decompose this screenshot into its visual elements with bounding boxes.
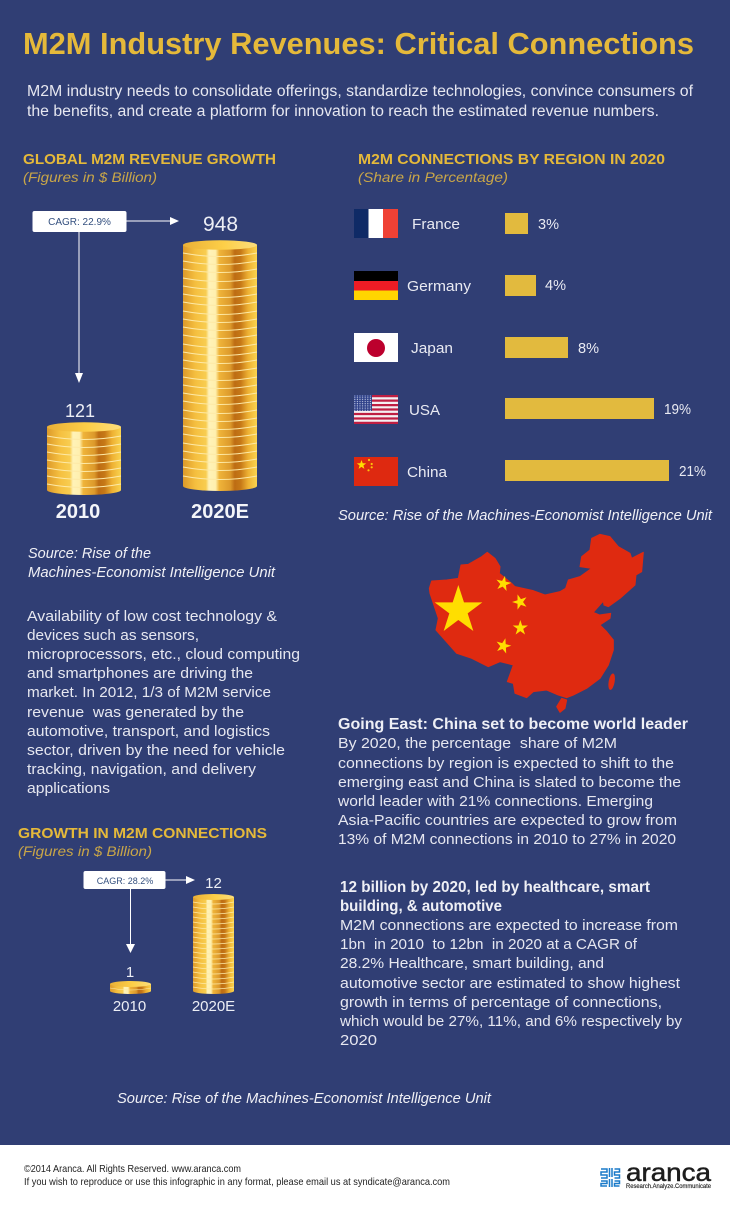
heading: global revenue growth: GLOBAL M2M REVENUE GROWTH xyxy=(23,151,276,168)
row: USA xyxy=(354,395,691,424)
map: China with flag stars xyxy=(429,534,643,712)
row: Japan: 8% xyxy=(578,340,599,357)
paragraph: market drivers: microprocessors, etc., cloud computing xyxy=(27,646,300,663)
text block: 12 billion by 2020: 28.2% Healthcare, smart building, and xyxy=(340,955,604,972)
label: 2010: 2010 xyxy=(56,501,100,523)
row: Japan: Japan xyxy=(411,340,453,357)
text block: Going East: Going East: China set to become world leader xyxy=(338,716,688,733)
row: USA: 19% xyxy=(664,401,691,418)
intro text: M2M industry needs to consolidate offerings, standardize technologies, convince consumers of xyxy=(27,83,694,100)
paragraph: market drivers: revenue was generated by the xyxy=(27,704,244,721)
text block: 12 billion by 2020: which would be 27%, 11%, and 6% respectively by xyxy=(339,1013,683,1030)
text block: Going East: By 2020, the percentage share of M2M xyxy=(338,735,617,752)
heading: connections by region: (Share in Percentage) xyxy=(358,169,508,185)
row: Germany: Germany xyxy=(407,278,472,295)
text block: Going East: Asia-Pacific countries are expected to grow from xyxy=(338,812,677,829)
source: revenue growth: Machines-Economist Intelligence Unit xyxy=(28,565,276,581)
paragraph: market drivers: applications xyxy=(27,780,110,797)
text block: Going East: emerging east and China is slated to become the xyxy=(338,774,681,791)
text block: Going East: 13% of M2M connections in 2010 to 27% in 2020 xyxy=(338,831,676,848)
row: France: 3% xyxy=(538,216,559,233)
label: 2010 small: 2010 xyxy=(113,998,146,1015)
paragraph: market drivers: market. In 2012, 1/3 of M2M service xyxy=(27,684,271,701)
chart: global revenue coin stacks xyxy=(32,211,257,523)
value: 121: 121 xyxy=(65,401,95,421)
logo: aranca: aranca xyxy=(626,1159,711,1187)
paragraph: market drivers: sector, driven by the need for vehicle xyxy=(27,742,285,759)
paragraph: market drivers: automotive, transport, and logistics xyxy=(27,723,270,740)
arrows: CAGR small xyxy=(126,876,195,953)
row: China: 21% xyxy=(679,463,706,480)
callout: CAGR 28.2% xyxy=(84,871,166,889)
text block: 12 billion by 2020: building, & automotive xyxy=(340,898,502,915)
label: 2020E: 2020E xyxy=(191,501,249,523)
heading: growth in connections xyxy=(18,825,267,859)
coin stack: 2020E small xyxy=(193,894,234,994)
logo: aranca xyxy=(601,1159,711,1190)
flag: Germany xyxy=(354,271,398,300)
chart: connections by region xyxy=(354,209,706,486)
row: Germany: 4% xyxy=(545,277,566,294)
value: 948: 948 xyxy=(203,213,238,236)
arrows: CAGR xyxy=(75,217,179,383)
paragraph: market drivers: Availability of low cost technology & xyxy=(27,608,277,625)
coin stack: 2010 small xyxy=(110,981,151,994)
row: USA: USA xyxy=(409,402,440,419)
text block: 12 billion by 2020: 12 billion by 2020, led by healthcare, smart xyxy=(340,879,651,896)
callout: CAGR 22.9% xyxy=(32,211,126,232)
text block: 12 billion by 2020: M2M connections are expected to increase from xyxy=(340,917,678,934)
row: France: France xyxy=(412,216,460,233)
heading: connections by region: M2M CONNECTIONS BY REGION IN 2020 xyxy=(358,151,665,168)
value: 1: 1 xyxy=(126,964,134,981)
flag: China xyxy=(354,457,398,486)
paragraph: market drivers: and smartphones are driving the xyxy=(27,665,253,682)
source: regions: Source: Rise of the Machines-Economist Intelligence Unit xyxy=(338,508,713,524)
heading: growth in connections: GROWTH IN M2M CONNECTIONS xyxy=(18,825,267,842)
text block: 12 billion by 2020 xyxy=(339,879,683,1049)
paragraph: market drivers: tracking, navigation, and delivery xyxy=(27,761,257,778)
row: China: China xyxy=(407,464,448,481)
text block: 12 billion by 2020: growth in terms of percentage of connections, xyxy=(340,994,662,1011)
paragraph: market drivers: devices such as sensors, xyxy=(27,627,199,644)
callout: CAGR 28.2%: CAGR: 28.2% xyxy=(97,876,153,886)
label: 2020E small: 2020E xyxy=(192,998,235,1015)
text block: 12 billion by 2020: 1bn in 2010 to 12bn in 2020 at a CAGR of xyxy=(340,936,638,953)
heading: global revenue growth xyxy=(23,151,276,185)
footer text: If you wish to reproduce or use this infographic in any format, please email us at syndicate@aranca.com xyxy=(24,1176,450,1188)
flag: USA xyxy=(354,395,398,424)
logo: aranca: Research.Analyze.Communicate xyxy=(626,1183,711,1190)
icon: aranca mark xyxy=(601,1168,620,1187)
row: China xyxy=(354,457,706,486)
intro text xyxy=(27,83,694,120)
intro text: the benefits, and create a platform for innovation to reach the estimated revenue numbers. xyxy=(27,103,659,120)
heading: global revenue growth: (Figures in $ Billion) xyxy=(23,169,157,185)
coin stack: 2020E xyxy=(183,240,257,491)
footer text xyxy=(24,1163,450,1188)
row: Germany xyxy=(354,271,566,300)
footer text: ©2014 Aranca. All Rights Reserved. www.aranca.com xyxy=(24,1163,241,1175)
text block: Going East xyxy=(337,716,688,848)
chart: connections coin stacks xyxy=(84,871,235,1015)
footer band xyxy=(0,1145,730,1209)
heading: growth in connections: (Figures in $ Billion) xyxy=(18,843,152,859)
flag: France xyxy=(354,209,398,238)
text block: 12 billion by 2020: 2020 xyxy=(340,1032,377,1049)
row: Japan xyxy=(354,333,599,362)
text block: Going East: connections by region is expected to shift to the xyxy=(338,755,674,772)
source: revenue growth xyxy=(28,546,276,581)
title: M2M Industry Revenues: Critical Connections xyxy=(23,26,694,61)
text block: 12 billion by 2020: automotive sector are estimated to show highest xyxy=(340,975,681,992)
paragraph: market drivers xyxy=(27,608,300,797)
source: revenue growth: Source: Rise of the xyxy=(28,546,151,562)
coin stack: 2010 xyxy=(47,422,121,495)
heading: connections by region xyxy=(358,151,665,185)
value: 12: 12 xyxy=(205,875,222,892)
text block: Going East: world leader with 21% connections. Emerging xyxy=(337,793,653,810)
source: bottom: Source: Rise of the Machines-Economist Intelligence Unit xyxy=(117,1091,492,1107)
callout: CAGR 22.9%: CAGR: 22.9% xyxy=(48,217,111,228)
flag: Japan xyxy=(354,333,398,362)
row: France xyxy=(354,209,559,238)
